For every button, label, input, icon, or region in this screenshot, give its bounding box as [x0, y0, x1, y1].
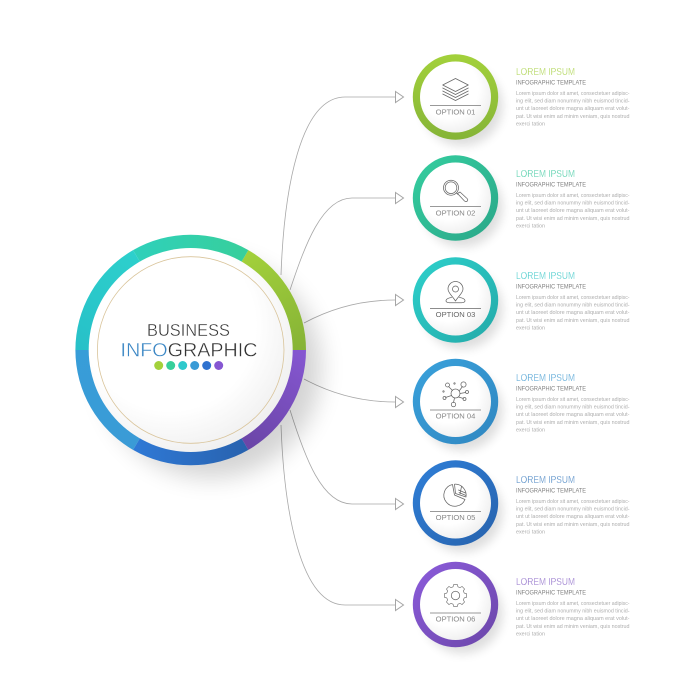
text block: option 06 [516, 577, 630, 638]
hub gold ring [97, 257, 284, 443]
icon: layers [443, 78, 468, 100]
ring segment: purple [238, 350, 306, 450]
text block: option 06: exerci tation [516, 632, 545, 638]
text block: option 06: ing elit, sed diam nonummy nibh euismod tincid- [516, 608, 630, 614]
hub white disc [89, 248, 293, 452]
ring segment: light blue [75, 350, 144, 450]
text block: option 03: Lorem ipsum dolor sit amet, consectetuer adipisc- [516, 295, 630, 301]
icon: gear [444, 584, 467, 607]
central hub circle [75, 235, 321, 478]
option label: OPTION 01 [436, 108, 475, 116]
text block: option 01: ing elit, sed diam nonummy nibh euismod tincid- [516, 98, 630, 104]
text block: option 05: ing elit, sed diam nonummy nibh euismod tincid- [516, 506, 630, 512]
text block: option 06: INFOGRAPHIC TEMPLATE [516, 590, 586, 596]
text block: option 06: pat. Ut wisi enim ad minim veniam, quis nostrud [516, 624, 630, 630]
text block: option 01: unt ut laoreet dolore magna aliquam erat volut- [516, 106, 630, 112]
text block: option 04: LOREM IPSUM [516, 373, 575, 384]
arrow: to option 02 [396, 192, 404, 204]
icon: network [443, 382, 468, 407]
text block: option 04 [516, 373, 630, 434]
text block: option 05: INFOGRAPHIC TEMPLATE [516, 488, 586, 494]
text block: option 02: INFOGRAPHIC TEMPLATE [516, 182, 586, 188]
text block: option 03: INFOGRAPHIC TEMPLATE [516, 284, 586, 290]
text block: option 05: unt ut laoreet dolore magna aliquam erat volut- [516, 514, 630, 520]
text block: option 04: unt ut laoreet dolore magna aliquam erat volut- [516, 412, 630, 418]
text block: option 03: exerci tation [516, 326, 545, 332]
icon: map pin [446, 282, 465, 303]
option 03 [413, 257, 502, 349]
option label: OPTION 04 [436, 412, 475, 420]
arrow: to option 01 [396, 92, 404, 102]
text block: option 03: unt ut laoreet dolore magna aliquam erat volut- [516, 310, 630, 316]
text block: option 05: exerci tation [516, 530, 545, 536]
text block: option 01: Lorem ipsum dolor sit amet, consectetuer adipisc- [516, 91, 630, 97]
text block: option 04: ing elit, sed diam nonummy nibh euismod tincid- [516, 404, 630, 410]
text block: option 05 [516, 475, 630, 536]
arrow: to option 05 [396, 498, 404, 510]
arrow: to option 03 [396, 294, 404, 306]
text block: option 04: exerci tation [516, 428, 545, 434]
option 06 [413, 562, 502, 654]
text block: option 05: pat. Ut wisi enim ad minim veniam, quis nostrud [516, 522, 630, 528]
ring segment: teal [75, 250, 144, 350]
text block: option 06: unt ut laoreet dolore magna aliquam erat volut- [516, 616, 630, 622]
option 05 [413, 460, 502, 552]
text block: option 04: Lorem ipsum dolor sit amet, consectetuer adipisc- [516, 397, 630, 403]
text block: option 01: LOREM IPSUM [516, 67, 575, 78]
text block: option 02: unt ut laoreet dolore magna aliquam erat volut- [516, 208, 630, 214]
icon: pie chart [444, 484, 466, 506]
option 04 [413, 359, 502, 450]
option 02 [413, 155, 502, 247]
ring segment: emerald [133, 235, 248, 269]
icon: magnifier [444, 180, 468, 202]
text block: option 02: pat. Ut wisi enim ad minim veniam, quis nostrud [516, 216, 630, 222]
text block: option 04: pat. Ut wisi enim ad minim veniam, quis nostrud [516, 420, 630, 426]
text block: option 05: Lorem ipsum dolor sit amet, consectetuer adipisc- [516, 499, 630, 505]
ring segment: dark blue [133, 431, 248, 465]
option label: OPTION 06 [436, 614, 475, 624]
text block: option 01: exerci tation [516, 122, 545, 128]
text block: option 03: pat. Ut wisi enim ad minim veniam, quis nostrud [516, 318, 630, 324]
arrow: to option 04 [396, 396, 404, 408]
text block: option 03: LOREM IPSUM [516, 271, 575, 282]
text block: option 05: LOREM IPSUM [516, 475, 575, 486]
text block: option 02: ing elit, sed diam nonummy nibh euismod tincid- [516, 200, 630, 206]
text block: option 03 [516, 271, 630, 332]
text block: option 06: Lorem ipsum dolor sit amet, consectetuer adipisc- [516, 601, 630, 607]
text block: option 02 [516, 169, 630, 230]
text block: option 02: exerci tation [516, 224, 545, 230]
option label: OPTION 05 [436, 513, 475, 522]
option 01 [413, 54, 502, 146]
text block: option 01 [516, 67, 630, 128]
text block: option 03: ing elit, sed diam nonummy nibh euismod tincid- [516, 302, 630, 308]
arrow: to option 06 [396, 600, 404, 610]
hub title: business: BUSINESS [147, 320, 230, 340]
text block: option 04: INFOGRAPHIC TEMPLATE [516, 386, 586, 392]
text block: option 06: LOREM IPSUM [516, 577, 575, 588]
ring segment: green [238, 250, 306, 350]
option label: OPTION 03 [436, 310, 475, 319]
text block: option 02: LOREM IPSUM [516, 169, 575, 180]
hub title: infographic: INFOGRAPHIC [120, 340, 258, 362]
hub colour dots [154, 361, 223, 370]
text block: option 01: INFOGRAPHIC TEMPLATE [516, 80, 586, 86]
option label: OPTION 02 [436, 208, 475, 218]
text block: option 01: pat. Ut wisi enim ad minim veniam, quis nostrud [516, 114, 630, 120]
text block: option 02: Lorem ipsum dolor sit amet, consectetuer adipisc- [516, 193, 630, 199]
connectors: lines from hub to options [281, 97, 395, 605]
